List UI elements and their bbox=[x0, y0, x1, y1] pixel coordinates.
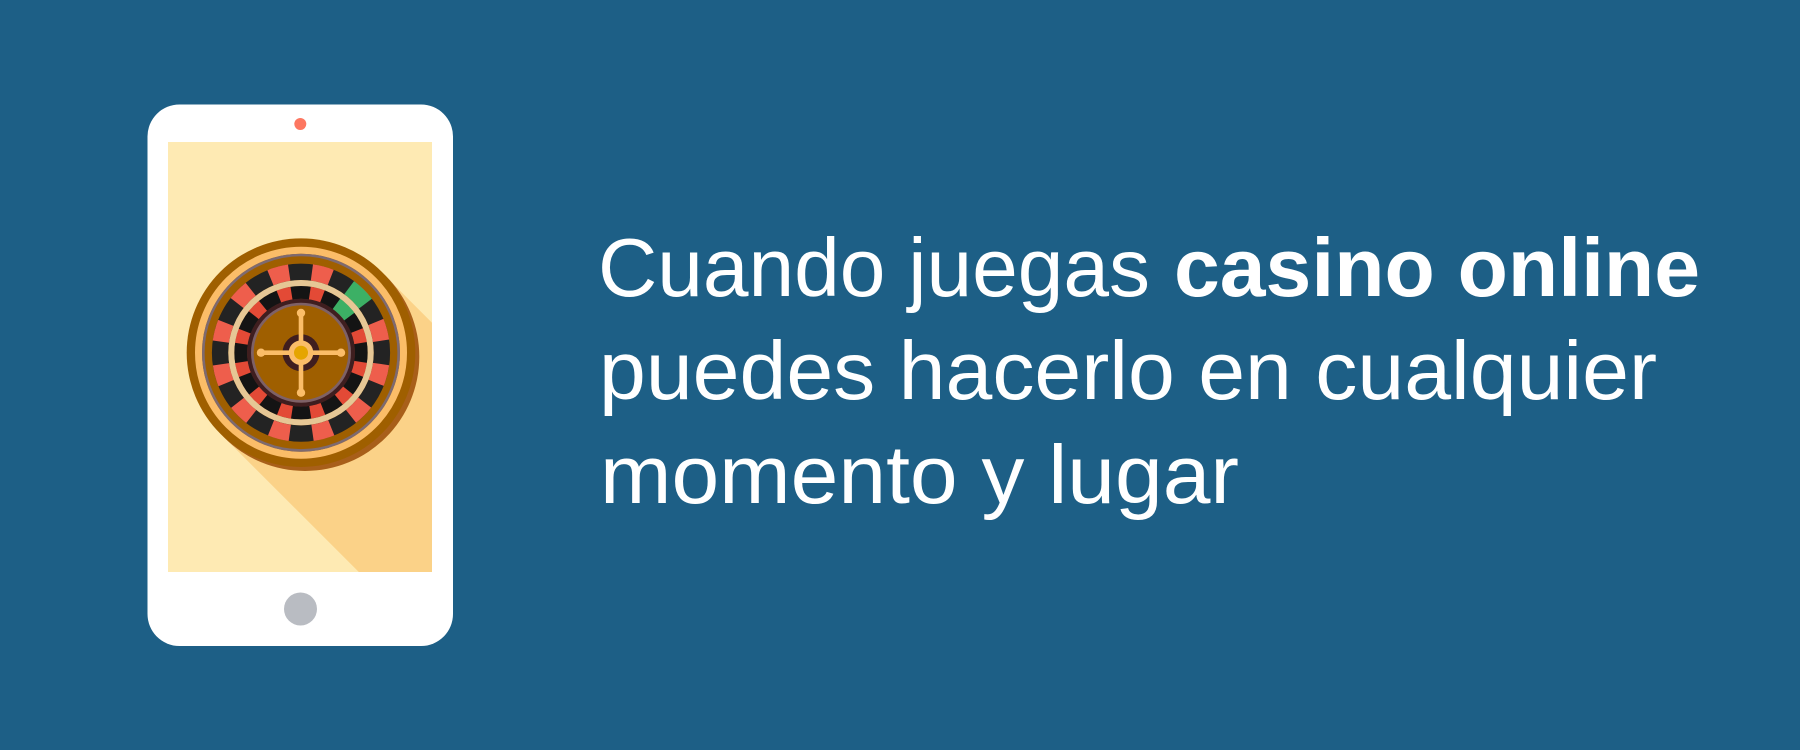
home button bbox=[284, 592, 317, 626]
line 1 bold: casino online bbox=[1174, 221, 1700, 314]
centre plate bbox=[254, 305, 348, 400]
line 1 regular: Cuando juegas bbox=[598, 221, 1150, 314]
line 3: momento y lugar bbox=[600, 428, 1239, 521]
outer pockets red bbox=[220, 272, 382, 434]
phone body bbox=[148, 104, 453, 646]
grey ring bbox=[203, 255, 399, 450]
inner pockets red bbox=[241, 292, 361, 413]
roulette wheel bbox=[187, 238, 419, 471]
tan ring bbox=[198, 250, 404, 455]
hub centre bbox=[294, 346, 308, 360]
cream ring bbox=[231, 283, 371, 422]
icon: smartphone with roulette wheel bbox=[148, 104, 453, 646]
camera dot bbox=[294, 118, 306, 130]
long shadow bbox=[220, 272, 432, 572]
spindle cross bbox=[257, 309, 345, 397]
wheel outer rim bbox=[187, 238, 415, 467]
inner pockets dark bbox=[241, 292, 361, 413]
grey inner ring bbox=[251, 303, 351, 403]
line 2: puedes hacerlo en cualquier bbox=[599, 324, 1657, 417]
dark inner ring bbox=[247, 299, 355, 407]
screen bbox=[168, 142, 432, 572]
hub base bbox=[282, 334, 320, 371]
green pocket bbox=[220, 272, 382, 434]
wheel shadow crescent bbox=[191, 242, 419, 471]
headline text bbox=[598, 221, 1700, 521]
outer pockets dark bbox=[220, 272, 382, 434]
